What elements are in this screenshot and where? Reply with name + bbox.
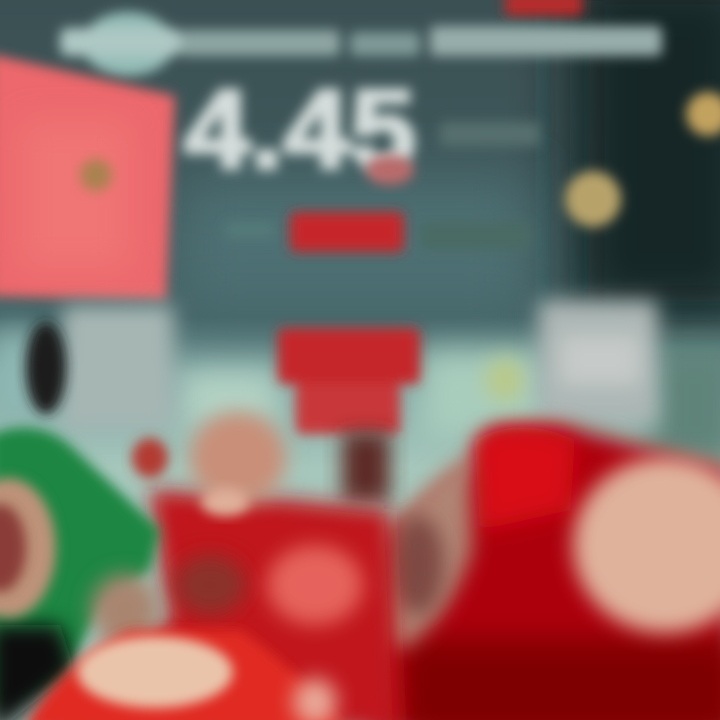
foreground bottom red mushroom [25,630,345,720]
panel: left pink notice [0,54,175,300]
cream spot right [573,457,720,633]
icon: olive seal [80,159,112,191]
cream spot centre [379,455,472,650]
icon: gold coin right [686,92,720,136]
white card right [538,300,658,425]
dark figure [26,322,66,414]
foreground red mass [370,425,720,720]
foreground middle red shape [30,412,400,720]
red stacked label [278,328,420,434]
foreground green shape [0,428,160,720]
white card left [26,305,174,430]
large figure: 4.45 [184,67,416,192]
heading banner [60,12,662,76]
cream ring [0,478,56,618]
small side text [225,122,540,250]
icon: gold coin centre [565,171,621,227]
red label [290,212,404,252]
top red tab [505,0,583,16]
dark post [342,432,390,502]
